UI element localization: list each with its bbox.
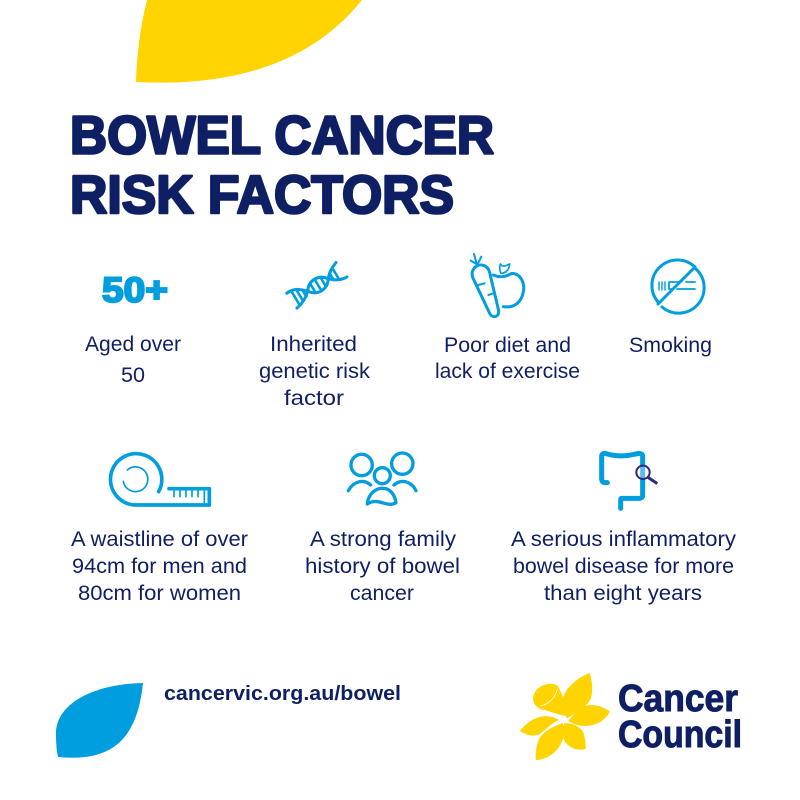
wordmark: Council bbox=[618, 714, 742, 756]
wordmark bbox=[618, 678, 742, 756]
label: family history bbox=[305, 528, 460, 605]
label: aged over 50: Aged over bbox=[85, 333, 181, 356]
risk factor: waistline bbox=[71, 454, 248, 605]
label: waistline: 80cm for women bbox=[78, 582, 241, 605]
icon: tape measure bbox=[110, 454, 209, 505]
yellow petal shape bbox=[136, 0, 362, 83]
icon: family group bbox=[348, 453, 416, 504]
label: aged over 50: 50 bbox=[121, 364, 145, 387]
label: inflammatory bowel disease: A serious inflammatory bbox=[511, 528, 737, 551]
wordmark: Cancer bbox=[618, 678, 738, 720]
label: waistline: A waistline of over bbox=[71, 528, 248, 551]
title: BOWEL CANCER bbox=[70, 106, 494, 166]
label: waistline bbox=[71, 528, 248, 605]
risk factor: inherited genetic risk bbox=[259, 261, 371, 410]
risk factor: aged over 50 bbox=[85, 271, 181, 387]
label: inherited genetic risk factor: Inherited bbox=[270, 333, 357, 356]
icon: 50+: 50+ bbox=[102, 271, 168, 310]
risk factor: family history bbox=[305, 453, 460, 605]
risk factor: inflammatory bowel disease bbox=[511, 453, 737, 605]
label: aged over 50 bbox=[85, 333, 181, 387]
label: poor diet and lack of exercise bbox=[435, 334, 580, 383]
label: poor diet and lack of exercise: Poor diet and bbox=[444, 334, 571, 357]
label: inflammatory bowel disease bbox=[511, 528, 737, 605]
website url: cancervic.org.au/bowel bbox=[164, 683, 401, 705]
title bbox=[70, 106, 494, 225]
label: smoking: Smoking bbox=[629, 334, 712, 357]
icon: DNA helix bbox=[286, 261, 347, 309]
label: family history: cancer bbox=[350, 582, 414, 605]
risk factor: smoking bbox=[629, 260, 712, 357]
label: inherited genetic risk factor bbox=[259, 333, 371, 410]
risk factor: poor diet and lack of exercise bbox=[435, 254, 580, 383]
icon: carrot and apple bbox=[471, 254, 524, 317]
icon: daffodil bbox=[521, 674, 609, 759]
icon: no smoking bbox=[652, 260, 704, 313]
label: waistline: 94cm for men and bbox=[72, 555, 247, 578]
label: inherited genetic risk factor: factor bbox=[284, 387, 344, 410]
label: inherited genetic risk factor: genetic risk bbox=[259, 360, 371, 383]
title: RISK FACTORS bbox=[70, 165, 454, 225]
label: inflammatory bowel disease: bowel disease for more bbox=[513, 555, 734, 578]
label: inflammatory bowel disease: than eight years bbox=[544, 582, 702, 605]
blue leaf shape bbox=[56, 683, 143, 758]
label: poor diet and lack of exercise: lack of exercise bbox=[435, 360, 580, 383]
icon: bowel with magnifier bbox=[602, 453, 657, 508]
logo: Cancer Council bbox=[521, 674, 742, 759]
label: family history: A strong family bbox=[310, 528, 457, 551]
label: family history: history of bowel bbox=[305, 555, 460, 578]
